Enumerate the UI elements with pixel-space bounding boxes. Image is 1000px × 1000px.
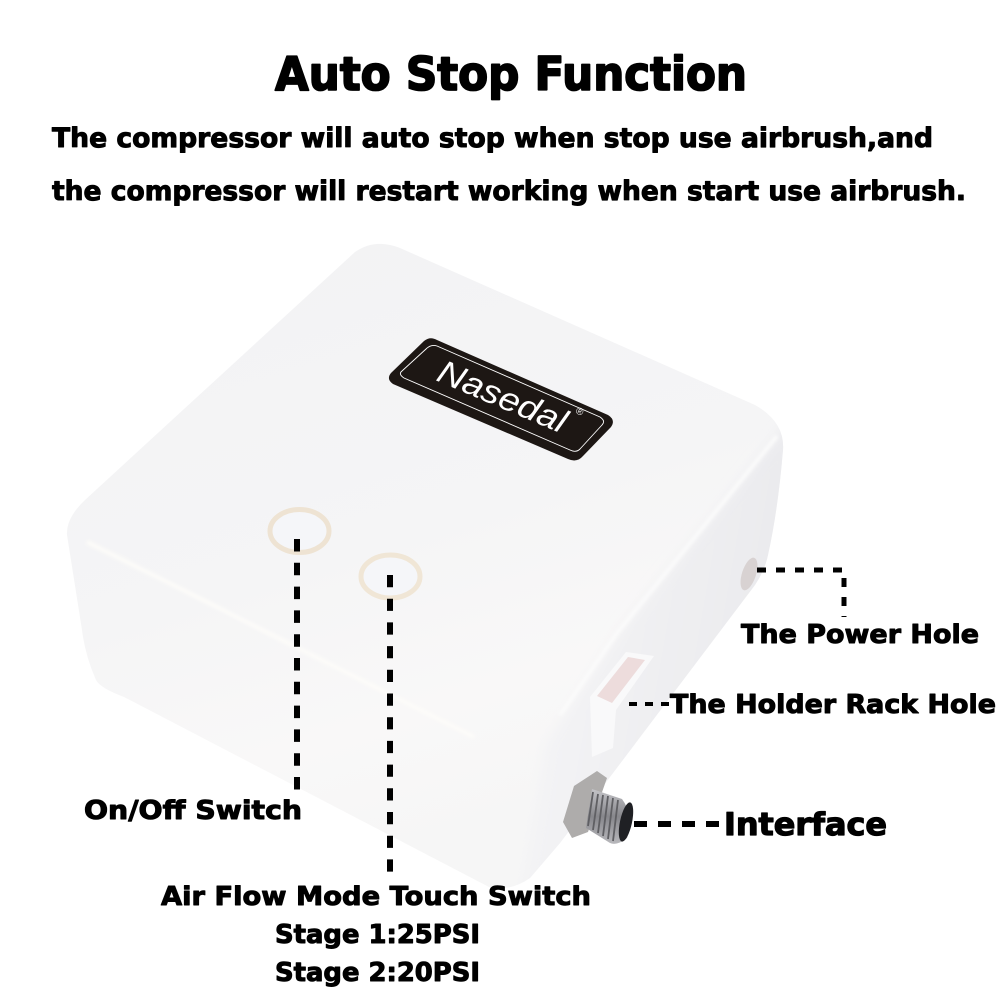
label: air flow mode touch switch: Stage 1:25PSI <box>275 920 480 950</box>
label: air flow mode touch switch: Stage 2:20PSI <box>275 958 480 988</box>
description text: The compressor will auto stop when stop use airbrush,and <box>52 123 933 154</box>
label: the power hole: The Power Hole <box>741 620 979 650</box>
title: Auto Stop Function <box>275 47 747 101</box>
label: the holder rack hole: The Holder Rack Hole <box>670 690 996 720</box>
label: on/off switch: On/Off Switch <box>84 796 302 826</box>
power hole <box>737 556 761 592</box>
device: right ridge highlight <box>560 436 777 715</box>
label: air flow mode touch switch: Air Flow Mode Touch Switch <box>161 882 591 912</box>
description text: the compressor will restart working when start use airbrush. <box>52 176 966 207</box>
description text <box>52 123 966 207</box>
device: body silhouette <box>67 244 783 888</box>
air interface fitting <box>563 771 636 844</box>
logo badge: Nasedal <box>432 352 575 441</box>
switch ring: on/off <box>270 510 329 552</box>
switch ring: air flow <box>361 555 420 598</box>
dashed leader: holder rack hole <box>629 702 670 706</box>
label: interface: Interface <box>724 807 887 843</box>
dashed leader: power hole <box>757 570 844 617</box>
dashed leader: interface <box>634 821 720 827</box>
dashed leader: on/off switch <box>294 539 300 790</box>
logo badge: ® <box>574 406 585 419</box>
device: front ridge highlight <box>87 542 474 737</box>
device: right side face <box>616 439 783 742</box>
compressor device <box>67 244 800 900</box>
dashed leader: air flow switch <box>387 575 393 872</box>
logo badge <box>389 338 613 460</box>
label: air flow mode touch switch <box>161 882 591 988</box>
holder rack hole <box>590 652 654 757</box>
